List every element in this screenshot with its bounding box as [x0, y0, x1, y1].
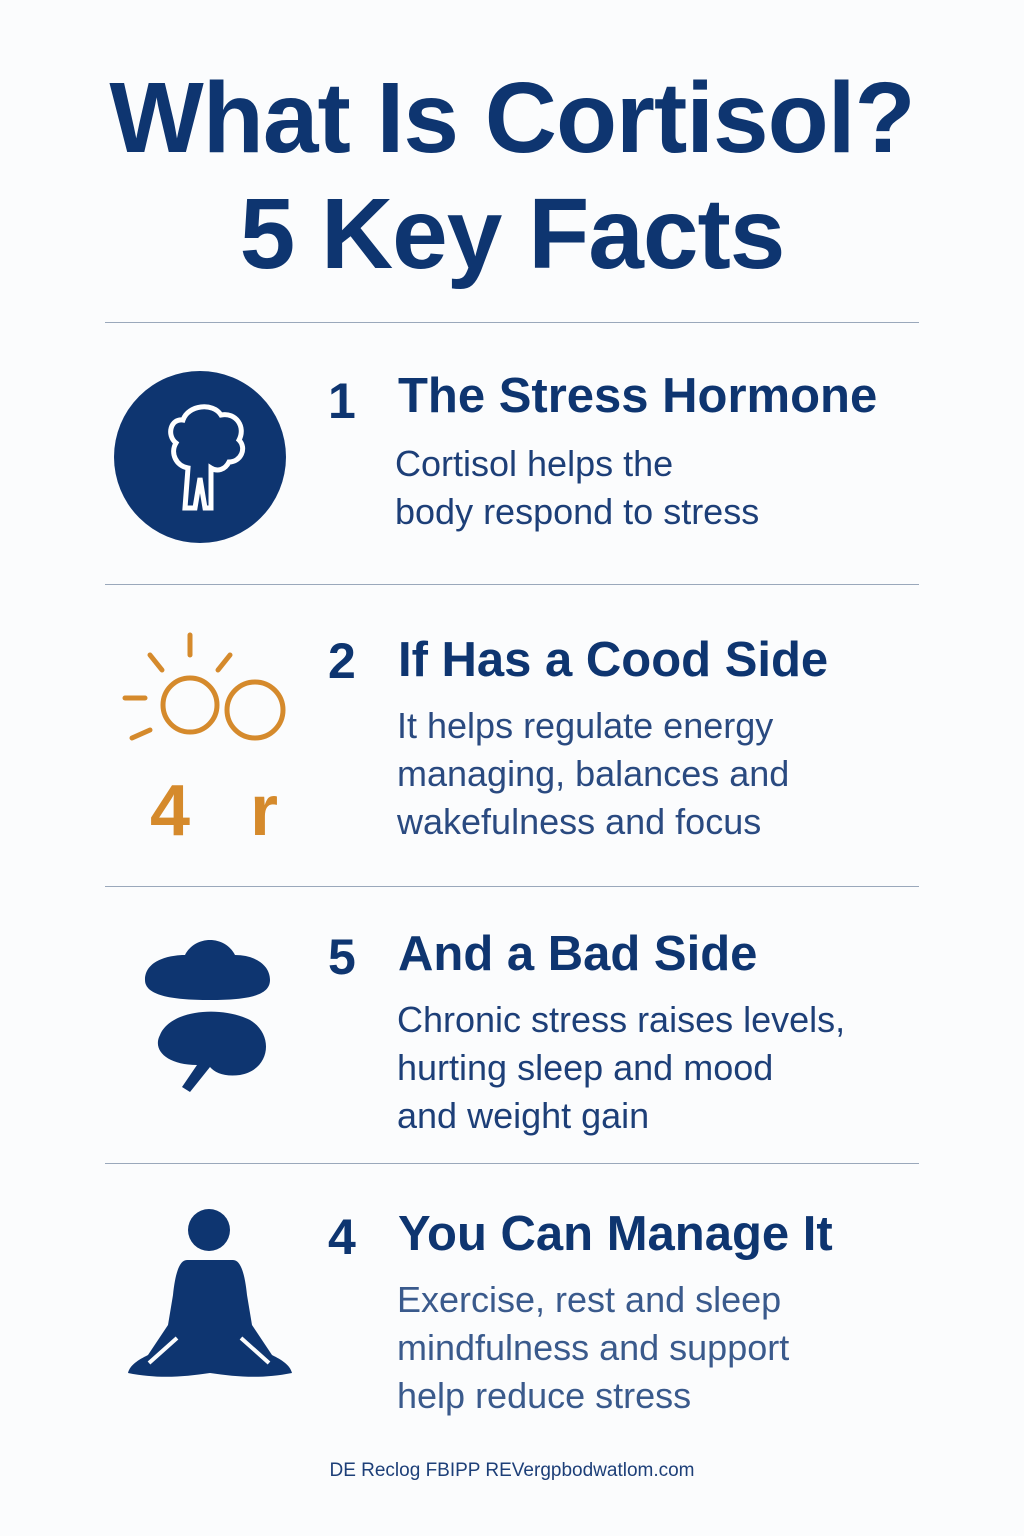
- heading: If Has a Cood Side: [398, 633, 828, 687]
- title: [109, 62, 915, 290]
- icon: stress head: [114, 371, 286, 543]
- body text: and weight gain: [397, 1095, 649, 1136]
- number 4: 4: [328, 1209, 356, 1265]
- body text: It helps regulate energy: [397, 705, 773, 746]
- heading: And a Bad Side: [398, 927, 757, 981]
- body text: hurting sleep and mood: [397, 1047, 773, 1088]
- title: 5 Key Facts: [240, 178, 784, 290]
- heading: The Stress Hormone: [398, 369, 877, 423]
- body text: [397, 999, 845, 1136]
- body text: Cortisol helps the: [395, 443, 673, 484]
- body text: wakefulness and focus: [397, 801, 761, 842]
- section 4: [128, 1207, 833, 1416]
- body text: [397, 1279, 789, 1416]
- heading: You Can Manage It: [398, 1207, 833, 1261]
- number 5: 5: [328, 929, 356, 985]
- section 3: [144, 927, 845, 1136]
- body text: mindfulness and support: [397, 1327, 789, 1368]
- body text: Exercise, rest and sleep: [397, 1279, 781, 1320]
- footer: DE Reclog FBIPP REVergpbodwatlom.com: [329, 1460, 695, 1481]
- body text: help reduce stress: [397, 1375, 691, 1416]
- icon: meditation figure: [128, 1209, 292, 1377]
- number 2: 2: [328, 633, 356, 689]
- body text: body respond to stress: [395, 491, 759, 532]
- body text: managing, balances and: [397, 753, 789, 794]
- icon: sun and numbers: [122, 632, 286, 845]
- body text: [397, 705, 789, 842]
- number 1: 1: [328, 373, 356, 429]
- body text: Chronic stress raises levels,: [397, 999, 845, 1040]
- body text: [395, 443, 759, 532]
- icon: cloud and brain: [144, 940, 270, 1092]
- section 2: [122, 632, 828, 845]
- section 1: [114, 369, 877, 543]
- title: What Is Cortisol?: [109, 62, 915, 174]
